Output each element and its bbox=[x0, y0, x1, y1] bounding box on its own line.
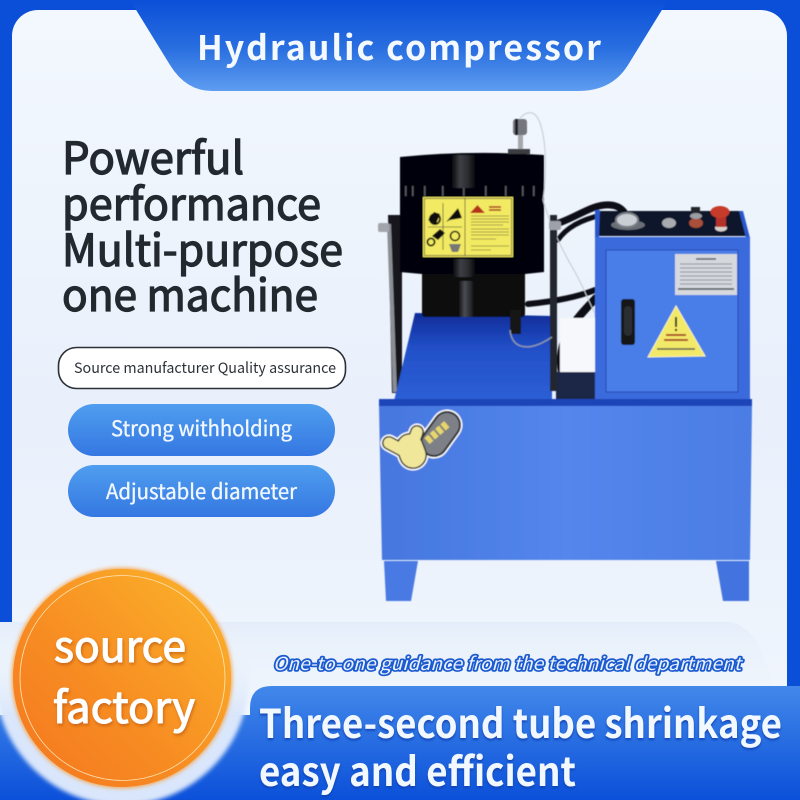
control cabinet bbox=[595, 237, 750, 403]
header shape bbox=[130, 0, 668, 91]
right post bolt bbox=[549, 221, 561, 230]
button shape bbox=[68, 404, 335, 456]
sloped blue cover bbox=[394, 313, 552, 401]
badge text line 1: source bbox=[54, 613, 186, 675]
base top rim bbox=[379, 399, 752, 407]
headline line 3: Multi-purpose bbox=[62, 215, 343, 279]
panel buttons bbox=[662, 207, 703, 228]
outlined tag bbox=[58, 348, 346, 388]
warning triangle bbox=[648, 306, 705, 357]
light band behind guidance text bbox=[0, 622, 772, 730]
sensor wire bbox=[520, 113, 596, 315]
badge text line 2: factory bbox=[53, 674, 195, 736]
badge disc glow bbox=[12, 568, 232, 788]
guidance caption: One-to-one guidance from the technical department bbox=[273, 650, 743, 676]
left post steel strip bbox=[387, 224, 397, 392]
small valve bbox=[510, 310, 552, 347]
headline line 4: one machine bbox=[62, 260, 318, 324]
cylinder ribs bbox=[405, 186, 535, 196]
cabinet door bbox=[606, 250, 738, 392]
cylinder highlights bbox=[452, 155, 475, 317]
button label: Adjustable diameter bbox=[106, 476, 298, 506]
control panel top bbox=[597, 211, 747, 236]
source factory badge bbox=[0, 551, 249, 800]
button shape bbox=[68, 465, 335, 517]
title: Hydraulic compressor bbox=[197, 21, 601, 70]
dark floor under bag bbox=[556, 372, 598, 404]
footer blue panel bbox=[250, 686, 800, 800]
pressure gauge bbox=[611, 213, 645, 230]
footer bar bbox=[0, 650, 800, 800]
right foot bbox=[716, 561, 749, 601]
base cabinet bbox=[379, 406, 752, 560]
control panel blue edges bbox=[595, 210, 750, 238]
white wrapped bag bbox=[560, 318, 596, 374]
tag text: Source manufacturer Quality assurance bbox=[74, 357, 336, 378]
cylinder lower body bbox=[422, 270, 525, 317]
feature button 2 bbox=[68, 465, 335, 517]
button label: Strong withholding bbox=[111, 413, 292, 443]
footer left band bbox=[0, 715, 262, 800]
badge inner ring bbox=[20, 576, 225, 780]
door handle bbox=[621, 299, 635, 345]
hoses bbox=[528, 205, 624, 372]
tag pill bbox=[58, 348, 346, 388]
post bolt bbox=[378, 223, 389, 232]
badge halo bbox=[0, 551, 249, 800]
headline bbox=[62, 123, 343, 324]
left foot bbox=[384, 561, 418, 601]
headline line 1: Powerful bbox=[62, 123, 244, 187]
nameplate bbox=[675, 254, 737, 295]
headline line 2: performance bbox=[62, 169, 321, 233]
feature button 1 bbox=[68, 404, 335, 456]
thumbs up sticker bbox=[389, 424, 447, 455]
cylinder upper body bbox=[400, 153, 544, 274]
yellow warning label bbox=[423, 197, 513, 257]
footer headline line 2: easy and efficient bbox=[259, 740, 576, 798]
emergency stop bbox=[710, 206, 730, 232]
left frame post bbox=[388, 215, 402, 393]
top fitting bbox=[508, 119, 530, 154]
header banner bbox=[130, 0, 668, 91]
badge disc bbox=[13, 569, 231, 787]
hydraulic machine illustration bbox=[378, 113, 752, 601]
right frame post bbox=[550, 215, 557, 391]
